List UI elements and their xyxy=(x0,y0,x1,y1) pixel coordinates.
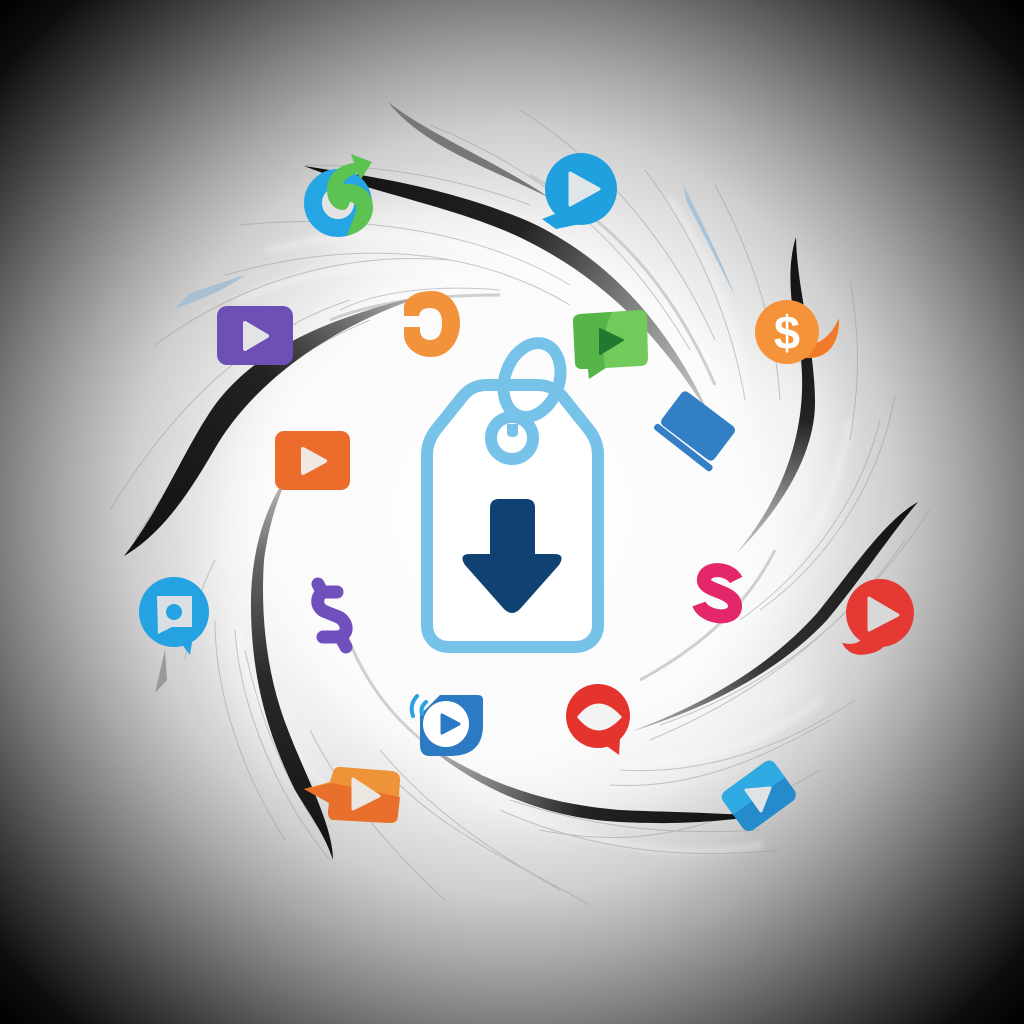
central price tag with down arrow xyxy=(427,335,598,647)
bold swirl arm: top xyxy=(304,166,712,420)
down arrow xyxy=(462,499,562,613)
icon: red play bubble xyxy=(842,579,914,655)
bold swirl arm: lower right xyxy=(630,502,918,732)
tag outline xyxy=(427,385,598,647)
bold swirl arm: bottom xyxy=(418,738,760,823)
bold swirl arm: lower left xyxy=(251,475,333,860)
icon: blue play bubble xyxy=(542,153,617,229)
icon: pink letter S xyxy=(699,570,736,616)
blue streak accents xyxy=(155,184,735,693)
bold swirl arm: right xyxy=(735,237,815,555)
white swirl glow xyxy=(240,232,800,789)
tag eyelet xyxy=(491,417,533,459)
icon: blue tilted video xyxy=(719,758,799,834)
icon: orange dollar coin xyxy=(755,300,839,364)
icon: orange ring letter xyxy=(404,291,460,357)
icon: blue chat square xyxy=(139,577,209,655)
icon: green and blue refresh xyxy=(313,154,373,236)
icon: orange speech video xyxy=(304,767,400,823)
soft white swirl bands xyxy=(238,200,850,851)
icon: orange dollar coin: $ xyxy=(774,306,800,359)
inner grey swirl arcs xyxy=(330,175,775,775)
string loop xyxy=(494,335,570,425)
bold swirl arm: upper left xyxy=(124,291,440,556)
icon: blue sound play xyxy=(412,695,483,756)
fine swirl strokes xyxy=(110,110,930,905)
icon: green chat video xyxy=(573,310,648,379)
icon: red eye bubble xyxy=(566,684,630,755)
icon: purple dollar sign xyxy=(318,584,346,647)
icon: purple video xyxy=(217,306,293,365)
swirl arm: upper grey streak xyxy=(388,102,550,198)
icon: blue card xyxy=(653,389,737,473)
eyelet hole tab xyxy=(507,424,518,437)
icon: orange video xyxy=(275,431,350,490)
